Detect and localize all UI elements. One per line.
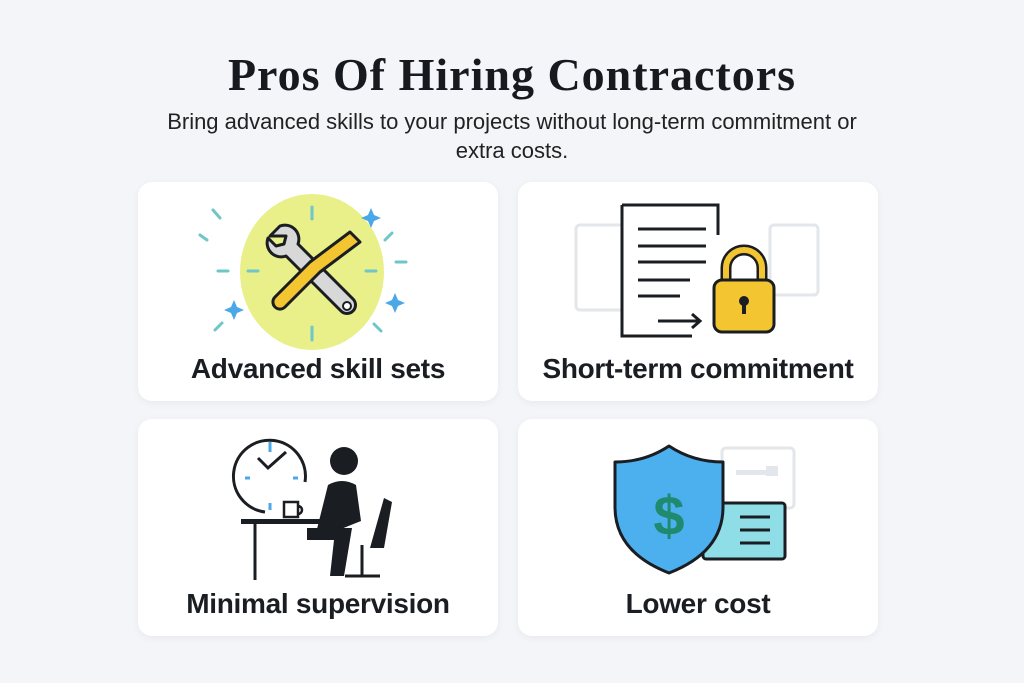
panel: minimal supervision [138,419,498,636]
panel: advanced skill sets [138,182,498,401]
icon: shield with dollar and card [614,444,796,574]
icon: contract and lock [574,204,820,338]
icon: person at desk with clock [232,438,392,580]
panel: lower cost [518,419,878,636]
label: Minimal supervision [186,588,450,619]
label: Advanced skill sets [191,353,445,384]
panel: short-term commitment [518,182,878,401]
icon: wrench and screwdriver [198,194,408,350]
subtitle: Bring advanced skills to your projects without long-term commitment or extra costs. [167,109,857,163]
label: Short-term commitment [542,353,854,384]
label: Lower cost [626,588,770,619]
icon: shield with dollar and card: $ [653,484,685,547]
title: Pros Of Hiring Contractors [228,49,796,100]
